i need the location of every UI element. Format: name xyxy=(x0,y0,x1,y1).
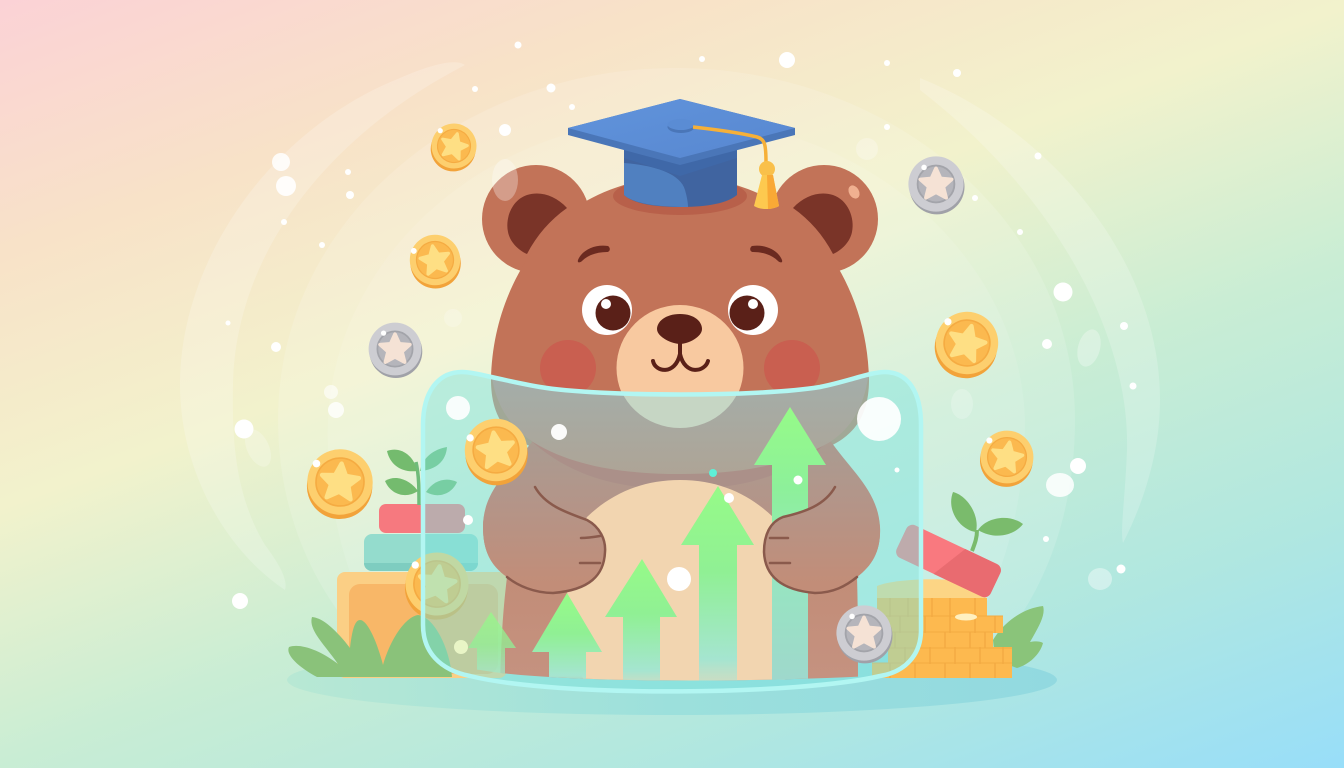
floating silver coins xyxy=(369,156,965,663)
left stack of books and box xyxy=(337,504,507,678)
bear head and ears xyxy=(482,165,878,450)
right coin stacks xyxy=(872,579,1012,678)
muzzle xyxy=(616,305,744,431)
head under glass xyxy=(491,370,869,474)
bear body seen through the jar xyxy=(483,377,880,680)
mouth xyxy=(653,344,708,370)
graduation cap xyxy=(568,99,795,215)
muzzle under glass xyxy=(624,396,736,428)
head xyxy=(491,177,869,450)
nose xyxy=(657,314,702,344)
right sprout xyxy=(951,492,1023,551)
jar rim and highlights xyxy=(423,372,921,691)
left grass xyxy=(288,615,452,677)
left sprout xyxy=(385,447,457,505)
ground shadow xyxy=(287,645,1057,715)
body xyxy=(483,440,880,690)
ear left xyxy=(482,165,590,273)
coin behind the glass xyxy=(401,548,473,624)
floating gold coins xyxy=(304,118,1038,522)
sparkles and bubbles xyxy=(226,42,1136,609)
glass jar fill xyxy=(423,372,921,691)
right grass xyxy=(993,606,1044,668)
growth arrows inside jar xyxy=(468,486,754,690)
cheeks xyxy=(540,340,596,396)
eyes xyxy=(582,285,632,335)
soft swirl halo behind the bear xyxy=(180,62,1160,670)
neck shadow xyxy=(532,441,822,480)
ear right xyxy=(770,165,878,273)
right arm xyxy=(764,470,880,593)
brows xyxy=(578,246,610,262)
tilted red book xyxy=(894,523,1003,599)
left arm xyxy=(483,486,606,594)
belly xyxy=(567,480,785,680)
tall arrow behind arm xyxy=(754,407,826,690)
